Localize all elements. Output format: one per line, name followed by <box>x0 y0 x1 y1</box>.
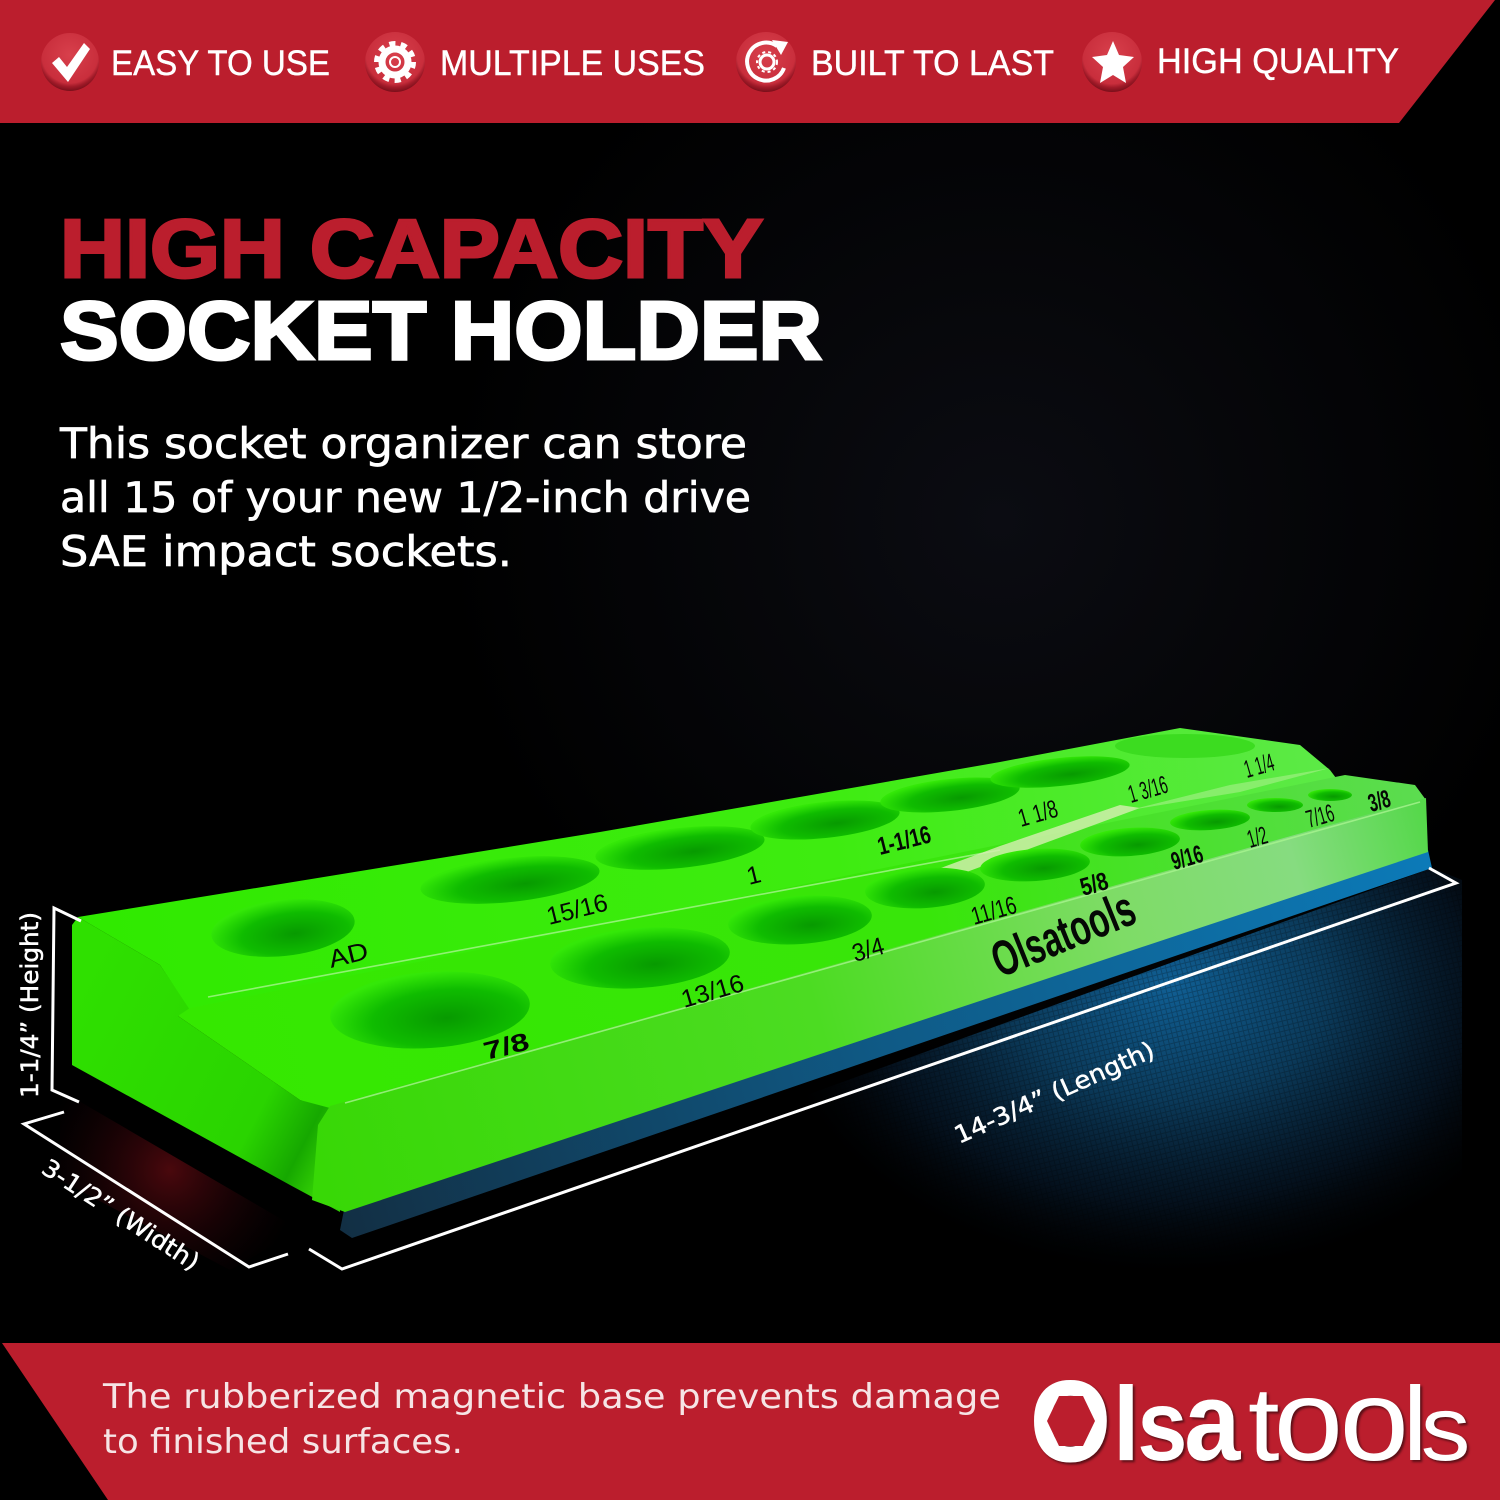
feature: easy to use <box>41 33 330 91</box>
ridge highlights <box>208 802 1420 1103</box>
brand logo: o <box>1340 1357 1409 1485</box>
headline line: socket holder: SOCKET HOLDER <box>60 284 822 377</box>
size labels: 15/16 <box>544 889 611 931</box>
banner shape <box>0 0 1495 123</box>
size labels <box>326 749 1394 1066</box>
height label: 1-1/4” (Height) <box>16 912 44 1098</box>
bottom description <box>102 1377 1001 1462</box>
length bracket <box>309 868 1456 1269</box>
length label: 14-3/4” (Length) <box>950 1036 1159 1149</box>
tray upper tier <box>78 728 1345 1010</box>
dimension: width <box>24 1112 288 1276</box>
headline <box>60 202 822 377</box>
size labels: AD <box>326 937 371 974</box>
bottom banner <box>2 1343 1500 1500</box>
dimension: length <box>309 868 1456 1269</box>
label: high quality: HIGH QUALITY <box>1157 42 1399 81</box>
surface: blue lit fabric <box>600 868 1462 1330</box>
height bracket <box>52 908 81 1102</box>
brand logo: l <box>1113 1366 1139 1483</box>
size labels: 1 1/4 <box>1241 749 1278 784</box>
size labels: 1-1/16 <box>875 821 934 861</box>
brand logo: s <box>1421 1377 1470 1480</box>
top banner <box>0 0 1495 123</box>
tray rubber base <box>340 850 1432 1238</box>
tray front face <box>312 798 1428 1212</box>
tray lower tier <box>178 775 1426 1108</box>
size labels: 7/8 <box>481 1027 532 1066</box>
icon: star <box>1082 32 1142 92</box>
icon: circular arrow with gear <box>736 32 796 92</box>
description text <box>59 419 751 576</box>
width label: 3-1/2” (Width) <box>37 1154 205 1276</box>
size labels: 13/16 <box>678 969 747 1014</box>
dimension: height <box>16 908 81 1102</box>
label: easy to use: EASY TO USE <box>111 44 330 83</box>
brand logo <box>1031 1357 1470 1485</box>
banner shape <box>2 1343 1500 1500</box>
size labels: 1 3/16 <box>1125 771 1171 809</box>
brand logo: a <box>1184 1359 1241 1484</box>
size labels: 3/4 <box>849 932 887 968</box>
size labels: 3/8 <box>1365 785 1394 818</box>
bottom description: to finished surfaces. <box>103 1422 463 1462</box>
width bracket <box>24 1112 288 1267</box>
description text: all 15 of your new 1/2-inch drive <box>60 473 751 522</box>
size labels: 1/2 <box>1244 821 1271 854</box>
icon: check mark <box>41 33 99 91</box>
size labels: 7/16 <box>1303 799 1338 834</box>
size labels: 9/16 <box>1168 840 1206 876</box>
brand logo: l <box>1402 1366 1428 1483</box>
size labels: 11/16 <box>968 891 1020 931</box>
size labels: 1 <box>744 860 764 891</box>
tray end face <box>72 917 340 1212</box>
bottom description: The rubberized magnetic base prevents damage <box>102 1377 1001 1417</box>
brand logo: o <box>1274 1357 1343 1485</box>
brand logo: s <box>1137 1371 1187 1482</box>
product: socket tray <box>72 728 1432 1238</box>
headline line: high capacity: HIGH CAPACITY <box>60 202 763 295</box>
surface: red lit fabric <box>60 1090 300 1270</box>
size labels: 1 1/8 <box>1015 795 1061 833</box>
description text: This socket organizer can store <box>59 419 747 468</box>
icon: gear <box>365 32 425 92</box>
feature: built to last <box>736 32 1054 92</box>
description text: SAE impact sockets. <box>60 527 512 576</box>
brand logo: t <box>1248 1366 1280 1483</box>
sockets: front row holes <box>328 789 1352 1055</box>
feature: multiple uses <box>365 32 705 92</box>
label: built to last: BUILT TO LAST <box>811 44 1054 83</box>
feature: high quality <box>1082 32 1399 92</box>
tray logo: Olsatools <box>983 880 1143 988</box>
sockets: back row holes <box>208 734 1255 963</box>
brand logo: O <box>1031 1359 1110 1484</box>
label: multiple uses: MULTIPLE USES <box>440 44 705 83</box>
size labels: 5/8 <box>1077 867 1112 902</box>
highlight along tier step <box>930 768 1330 880</box>
